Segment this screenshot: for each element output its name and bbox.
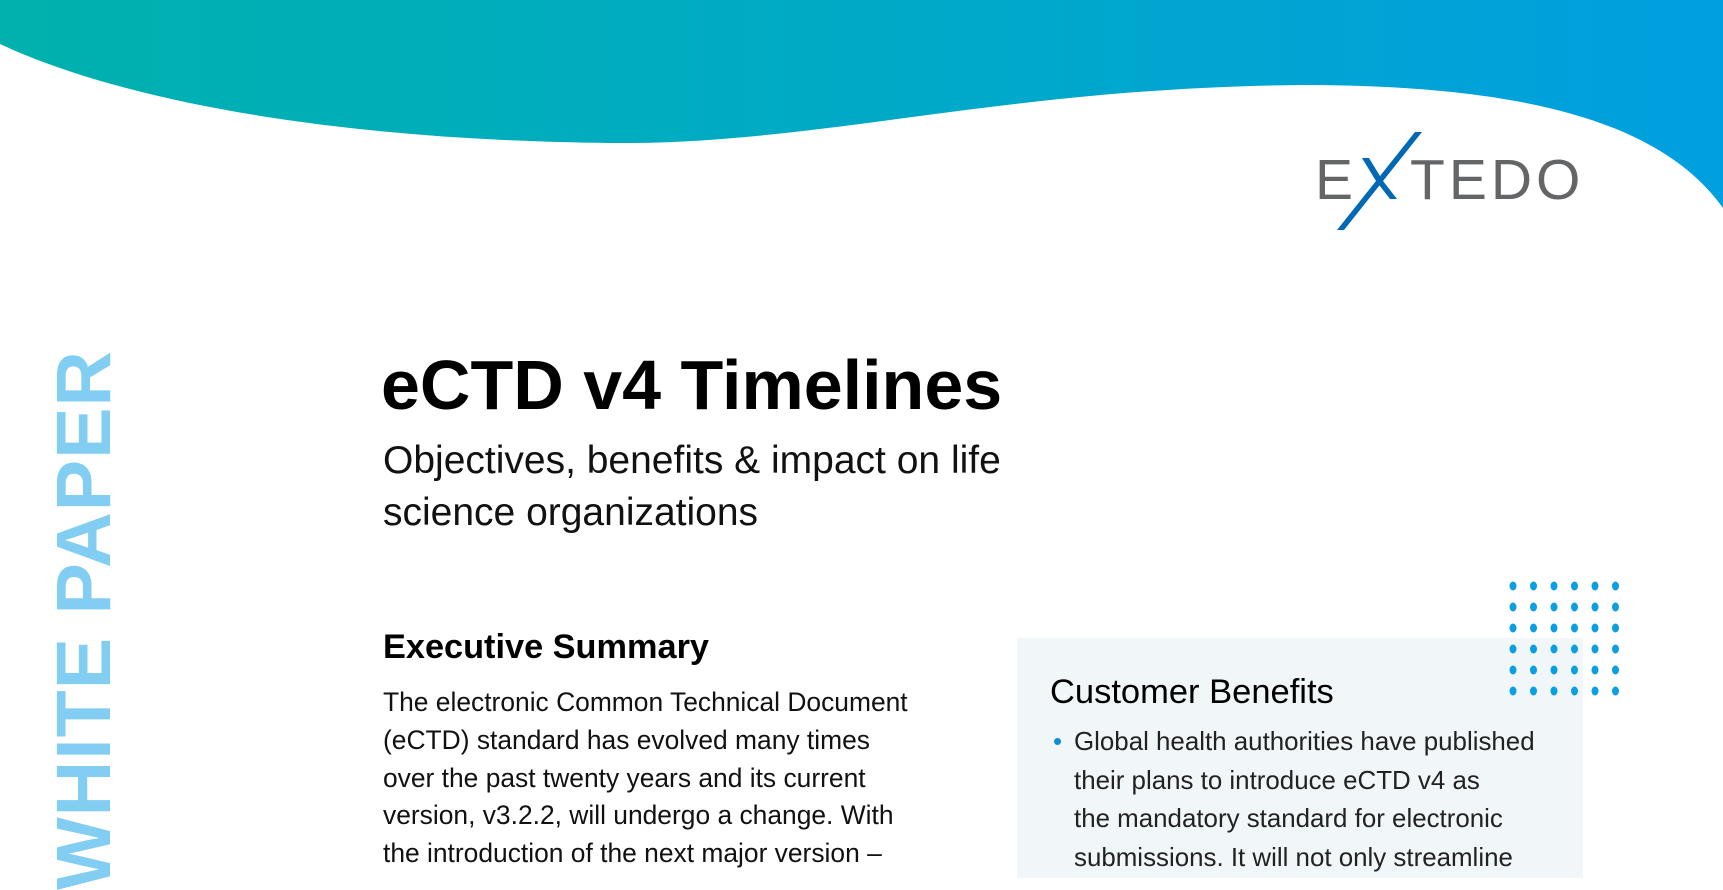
heading: Executive Summary: Executive Summary	[383, 628, 709, 666]
bullet list: their plans to introduce eCTD v4 as	[1074, 766, 1480, 794]
logo: EXTEDO: E	[1315, 148, 1356, 212]
subtitle: science organizations	[383, 491, 758, 534]
bullet list: the mandatory standard for electronic	[1074, 805, 1503, 833]
bullet list	[1053, 728, 1535, 872]
panel: customer benefits	[1017, 638, 1583, 878]
vertical label: WHITE PAPER: WHITE PAPER	[41, 350, 127, 890]
text block: executive summary body: (eCTD) standard has evolved many times	[383, 725, 870, 755]
text block: executive summary body: The electronic Common Technical Document	[383, 687, 908, 717]
decorative dot grid	[1510, 582, 1619, 696]
bullet list: submissions. It will not only streamline	[1074, 844, 1513, 872]
heading: Customer Benefits: Customer Benefits	[1050, 673, 1334, 711]
text block: executive summary body: over the past twenty years and its current	[383, 763, 866, 793]
subtitle: Objectives, benefits & impact on life	[383, 439, 1001, 482]
title: eCTD v4 Timelines	[381, 346, 1002, 424]
text block: executive summary body: version, v3.2.2, will undergo a change. With	[383, 800, 894, 830]
text block: executive summary body	[383, 687, 908, 868]
bullet list: Global health authorities have published	[1074, 728, 1535, 756]
header wave	[0, 0, 1723, 208]
subtitle	[383, 439, 1001, 534]
text block: executive summary body: the introduction of the next major version –	[383, 838, 882, 868]
bullet list: •	[1053, 728, 1062, 756]
logo: EXTEDO	[1315, 132, 1584, 230]
logo: EXTEDO: TEDO	[1410, 148, 1584, 212]
